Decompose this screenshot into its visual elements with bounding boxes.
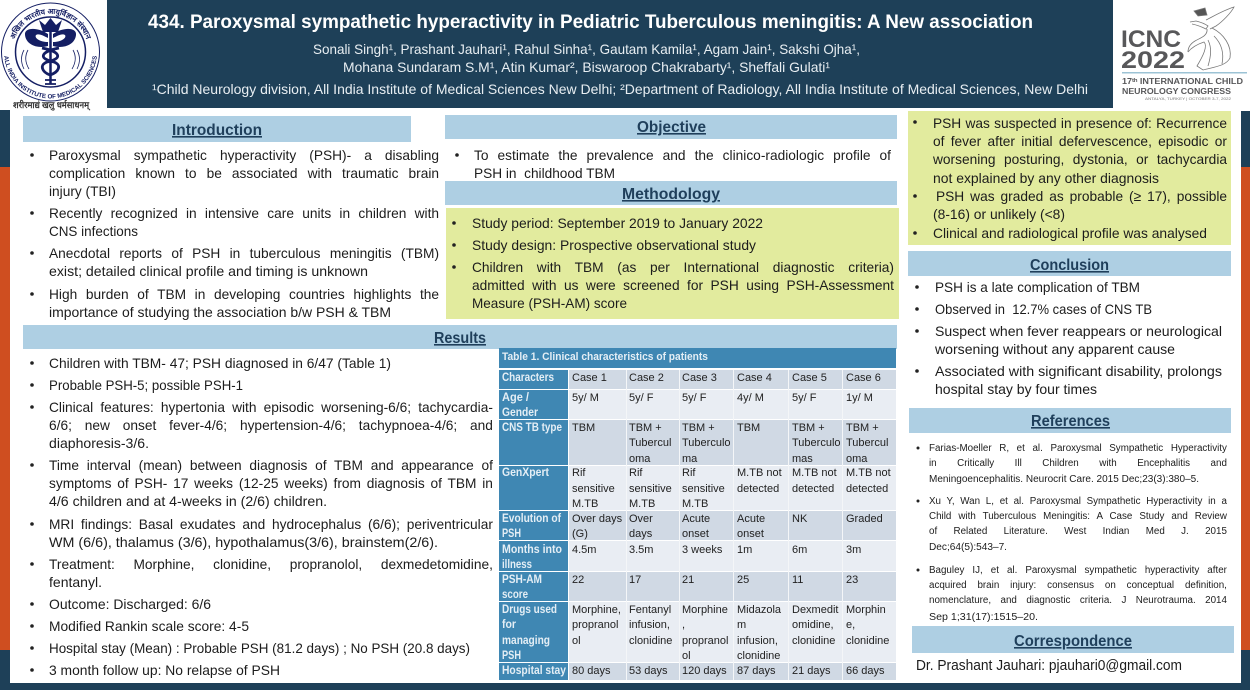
table cells: case 4: M.TB not: [737, 467, 782, 479]
list: references: acquired brain injury: consensus on conceptual definition,: [929, 580, 1227, 591]
table cells: case 2: TBM +: [629, 422, 662, 434]
table cells: case 2: Tubercul: [629, 437, 671, 449]
table cells: case 4: m: [737, 619, 746, 631]
table cells: case 4: Acute: [737, 513, 765, 525]
table cells: case 1: [572, 372, 623, 677]
table cells: case 2: clonidine: [629, 635, 672, 647]
table cells: case 4: onset: [737, 528, 764, 540]
table cells: case 3: Rif: [682, 467, 696, 479]
table row labels: PSH: [502, 650, 521, 662]
panel: methodology continued: Clinical and radiological profile was analysed: [933, 225, 1207, 241]
heading: conclusion: Conclusion: [1030, 257, 1109, 274]
list: references: Baguley IJ, et al. Paroxysmal sympathetic hyperactivity after: [929, 565, 1227, 576]
table cells: case 3: ma: [682, 453, 698, 465]
bullets: introduction: High burden of TBM in developing countries highlights the: [49, 286, 439, 302]
heading: introduction: Introduction: [172, 122, 262, 139]
table cells: case 3: 21: [682, 574, 694, 586]
table cells: case 2: Rif: [629, 467, 643, 479]
heading: methodology: [445, 181, 897, 205]
table cells: case 2: Fentanyl: [629, 604, 671, 616]
panel: methodology continued: of fever after initial defervescence, episodic or: [933, 133, 1227, 149]
table cells: case 4: TBM: [737, 422, 760, 434]
heading: objective: [445, 115, 897, 139]
table cells: case 1: 22: [572, 574, 584, 586]
table cells: case 5: M.TB not: [792, 467, 837, 479]
table cells: case 4: Case 4: [737, 372, 772, 384]
authors: Mohana Sundaram S.M¹, Atin Kumar², Biswaroop Chakrabarty¹, Sheffali Gulati¹: [343, 59, 830, 75]
table cells: case 3: Acute: [682, 513, 710, 525]
list: references: Dec;64(5):543–7.: [929, 542, 1007, 553]
table cells: case 6: 23: [846, 574, 858, 586]
table cells: case 6: 3m: [846, 544, 861, 556]
table cells: case 2: 53 days: [629, 665, 668, 677]
bullets: introduction: CNS infections: [49, 223, 138, 239]
table cells: case 3: sensitive: [682, 483, 725, 495]
table cells: case 5: omidine,: [792, 619, 834, 631]
panel: correspondence: [912, 626, 1234, 674]
table row labels: for: [502, 619, 516, 631]
panel: objective: [445, 115, 897, 181]
table cells: case 2: M.TB: [629, 498, 655, 510]
panel: methodology continued: PSH was graded as probable (≥ 17), possible: [936, 188, 1227, 204]
table cells: case 2: days: [629, 528, 653, 540]
table title: [499, 348, 896, 368]
title: 434. Paroxysmal sympathetic hyperactivity in Pediatric Tuberculous meningitis: A New association: [148, 11, 1033, 33]
list: references: Xu Y, Wan L, et al. Paroxysmal Sympathetic Hyperactivity in a: [929, 496, 1227, 507]
list: references: Sep 1;31(17):1515–20.: [929, 612, 1038, 623]
table cells: case 3: onset: [682, 528, 709, 540]
panel: introduction: [23, 116, 439, 320]
heading: methodology: Methodology: [622, 186, 720, 203]
text: objective: To estimate the prevalence and the clinico-radiologic profile of: [474, 147, 891, 163]
bullets: conclusion: Suspect when fever reappears or neurological: [935, 323, 1222, 339]
table cells: case 2: oma: [629, 453, 651, 465]
table row labels: Characters: [502, 372, 554, 384]
table row labels: Gender: [502, 407, 538, 419]
table cells: case 2: 17: [629, 574, 641, 586]
table row labels: Months into: [502, 544, 562, 556]
affiliations: ¹Child Neurology division, All India Institute of Medical Sciences New Delhi; ²Department of Radiology, All India Institute of Medical Sciences, New Delhi: [152, 81, 1088, 97]
table cells: case 6: oma: [846, 453, 868, 465]
bullets: results: 4/6 children and at 4-weeks in (2/6) children.: [49, 493, 327, 509]
table cells: case 4: [737, 372, 782, 677]
table cells: case 2: 5y/ F: [629, 392, 654, 404]
list: references: [916, 441, 1227, 623]
table row labels: CNS TB type: [502, 422, 562, 434]
list: references: Meningoencephalitis. Neurocrit Care. 2015 Dec;23(3):380–5.: [929, 474, 1199, 485]
table row labels: Hospital stay: [502, 665, 567, 677]
panel: methodology continued: PSH was suspected in presence of: Recurrence: [933, 115, 1227, 131]
bullets: introduction: complication known to be associated with traumatic brain: [49, 165, 439, 181]
table row labels: GenXpert: [502, 467, 549, 479]
bullets: introduction: Paroxysmal sympathetic hyperactivity (PSH)- a disabling: [49, 147, 439, 163]
list: references: Child with Tuberculous Meningitis: A Case Study and Review: [929, 511, 1227, 522]
table cells: case 5: Tuberculo: [792, 437, 841, 449]
table cells: case 3: 3 weeks: [682, 544, 723, 556]
bullets: conclusion: worsening without any apparent cause: [934, 341, 1175, 357]
text: objective: PSH in childhood TBM: [474, 165, 615, 181]
panel: methodology continued: (8-16) or unlikely (<8): [933, 206, 1065, 222]
methodology box: admitted with us were screened for PSH using PSH-Assessment: [472, 277, 894, 293]
heading: references: References: [1031, 413, 1110, 430]
methodology box: Measure (PSH-AM) score: [472, 295, 627, 311]
table cells: case 6: TBM +: [846, 422, 879, 434]
bullets: results: Probable PSH-5; possible PSH-1: [49, 377, 243, 393]
bullets: conclusion: [915, 279, 1222, 397]
logo: ICNC 2022: [1121, 7, 1247, 101]
table row labels: managing: [502, 635, 550, 647]
bullets: conclusion: PSH is a late complication of TBM: [935, 279, 1140, 295]
table cells: case 6: [846, 372, 891, 677]
table cells: case 1: sensitive: [572, 483, 615, 495]
bullets: results: Modified Rankin scale score: 4-5: [49, 618, 249, 634]
table cells: case 4: 1m: [737, 544, 752, 556]
heading: correspondence: [912, 626, 1234, 653]
logo: ICNC 2022: NEUROLOGY CONGRESS: [1122, 87, 1232, 96]
bullets: results: Children with TBM- 47; PSH diagnosed in 6/47 (Table 1): [49, 355, 391, 371]
table row labels: PSH-AM: [502, 574, 542, 586]
table cells: case 4: infusion,: [737, 635, 778, 647]
bullets: results: fentanyl.: [49, 574, 102, 590]
table cells: case 6: 1y/ M: [846, 392, 873, 404]
table cells: case 3: Case 3: [682, 372, 717, 384]
table cells: case 1: Case 1: [572, 372, 607, 384]
panel: methodology continued: [908, 111, 1231, 245]
bullets: introduction: importance of studying the association b/w PSH & TBM: [49, 304, 391, 320]
bullets: conclusion: Associated with significant disability, prolongs: [935, 363, 1222, 379]
table row labels: score: [502, 589, 528, 601]
bullets: results: Hospital stay (Mean) : Probable PSH (81.2 days) ; No PSH (20.8 days): [49, 640, 470, 656]
table cells: case 3: [682, 372, 731, 677]
bullets: results: Time interval (mean) between diagnosis of TBM and appearance of: [49, 457, 493, 473]
table cells: case 3: M.TB: [682, 498, 708, 510]
bullets: introduction: [30, 146, 439, 320]
table cells: case 4: Midazola: [737, 604, 782, 616]
table cells: case 6: Tubercul: [846, 437, 888, 449]
table cells: case 1: 4.5m: [572, 544, 596, 556]
table cells: case 5: Case 5: [792, 372, 827, 384]
table cells: case 6: clonidine: [846, 635, 889, 647]
bullets: results: 6/6; new onset fever-4/6; hypertension-4/6; tachypnoea-4/6; and: [49, 417, 493, 433]
table cells: case 5: clonidine: [792, 635, 835, 647]
bullets: results: Treatment: Morphine, clonidine, propranolol, dexmedetomidine,: [49, 556, 493, 572]
table cells: case 4: 87 days: [737, 665, 776, 677]
table cells: case 2: sensitive: [629, 483, 672, 495]
table cells: case 5: [792, 372, 841, 677]
table cells: case 2: Over: [629, 513, 653, 525]
table cells: case 1: 80 days: [572, 665, 611, 677]
table cells: case 3: ol: [682, 650, 691, 662]
logo: ICNC 2022: ICNC: [1121, 26, 1181, 53]
list: references: Farias-Moeller R, et al. Paroxysmal Sympathetic Hyperactivity: [929, 443, 1227, 454]
table cells: case 5: 6m: [792, 544, 807, 556]
table row labels: Age /: [502, 392, 530, 404]
table cells: case 6: M.TB not: [846, 467, 891, 479]
bullets: conclusion: hospital stay by four times: [935, 381, 1097, 397]
methodology box: Study design: Prospective observational study: [472, 237, 756, 253]
table cells: case 5: detected: [792, 483, 834, 495]
bullets: results: symptoms of PSH- 17 weeks (12-25 weeks) from diagnosis of TBM in: [49, 475, 493, 491]
logo: AIIMS seal: [0, 0, 107, 111]
table cells: case 3: Morphine: [682, 604, 728, 616]
table cells: case 2: 3.5m: [629, 544, 653, 556]
table cells: case 3: Tuberculo: [682, 437, 731, 449]
heading: conclusion: [908, 251, 1231, 276]
bullets: conclusion: Observed in 12.7% cases of CNS TB: [935, 301, 1152, 317]
table cells: case 2: infusion,: [629, 619, 670, 631]
table cells: case 5: mas: [792, 453, 813, 465]
table cells: case 1: (G): [572, 528, 588, 540]
list: references: of Related Literature. West Indian Med J. 2015: [929, 526, 1227, 537]
table cells: case 4: 25: [737, 574, 749, 586]
table cells: case 1: Morphine,: [572, 604, 621, 616]
table cells: case 5: 21 days: [792, 665, 831, 677]
table cells: case 5: 11: [792, 574, 803, 586]
table cells: case 2: Case 2: [629, 372, 664, 384]
contact line: Dr. Prashant Jauhari: pjauhari0@gmail.com: [916, 658, 1182, 674]
heading: results: [23, 325, 897, 349]
table cells: case 6: Morphin: [846, 604, 886, 616]
table cells: case 1: TBM: [572, 422, 595, 434]
text: objective: [455, 146, 891, 181]
table row labels: Evolution of: [502, 513, 561, 525]
table cells: case 6: Graded: [846, 513, 883, 525]
panel: methodology continued: worsening posturing, dystonia, or tachycardia: [933, 151, 1227, 167]
seal motto: शरीरमाद्यं खलु धर्मसाधनम्: [13, 99, 91, 111]
icon: whirling dervish: [1188, 7, 1234, 70]
table cells: case 6: Case 6: [846, 372, 881, 384]
table cells: case 3: TBM +: [682, 422, 715, 434]
bullets: introduction: Recently recognized in intensive care units in children with: [49, 205, 439, 221]
bullets: results: Clinical features: hypertonia with episodic worsening-6/6; tachycardia-: [49, 399, 493, 415]
table row labels: illness: [502, 559, 532, 571]
bullets: introduction: injury (TBI): [49, 183, 116, 199]
list: references: nomenclature, and diagnostic criteria. J Neurotrauma. 2014: [929, 595, 1227, 606]
panel: results: [23, 325, 897, 678]
table row shading: [499, 370, 896, 680]
table cells: case 1: 5y/ M: [572, 392, 599, 404]
table cells: case 5: Dexmedit: [792, 604, 838, 616]
bullets: results: MRI findings: Basal exudates and hydrocephalus (6/6); periventricular: [49, 516, 493, 532]
methodology box: Children with TBM (as per International diagnostic criteria): [472, 259, 894, 275]
table title: Table 1. Clinical characteristics of patients: [502, 351, 708, 363]
bullets: results: [30, 355, 493, 678]
bullets: introduction: Anecdotal reports of PSH in tuberculous meningitis (TBM): [49, 245, 439, 261]
logo: ICNC 2022: 2022: [1121, 47, 1185, 74]
heading: results: Results: [434, 330, 486, 347]
table cells: case 4: clonidine: [737, 650, 780, 662]
bullets: results: Outcome: Discharged: 6/6: [49, 596, 211, 612]
table cells: case 1: ol: [572, 635, 581, 647]
heading: introduction: [23, 116, 411, 142]
logo: AIIMS seal: अखिल भारतीय आयुर्विज्ञान संस्थान: [10, 8, 91, 40]
table cells: case 6: 66 days: [846, 665, 885, 677]
table cells: case 3: ,: [682, 619, 685, 631]
table cells: case 1: Over days: [572, 513, 623, 525]
heading: objective: Objective: [637, 119, 706, 136]
table cells: case 2: [629, 372, 672, 677]
table cells: case 4: 4y/ M: [737, 392, 764, 404]
authors: Sonali Singh¹, Prashant Jauhari¹, Rahul Sinha¹, Gautam Kamila¹, Agam Jain¹, Sakshi Ojha¹,: [313, 41, 860, 57]
bullets: results: diaphoresis-3/6.: [49, 435, 149, 451]
panel: references: [909, 408, 1231, 623]
table cells: case 4: detected: [737, 483, 779, 495]
table: clinical characteristics of patients: [499, 348, 896, 680]
table cells: case 1: propranol: [572, 619, 618, 631]
heading: references: [909, 408, 1231, 433]
panel: conclusion: [908, 251, 1231, 397]
table cells: case 5: TBM +: [792, 422, 825, 434]
bullets: introduction: exist; detailed clinical profile and timing is unknown: [49, 263, 368, 279]
logo: ICNC 2022: 17ᵗʰ INTERNATIONAL CHILD: [1122, 77, 1243, 86]
table row labels: [502, 372, 567, 677]
table cells: case 1: Rif: [572, 467, 586, 479]
table cells: case 5: NK: [792, 513, 808, 525]
logo: AIIMS seal: ALL INDIA INSTITUTE OF MEDICAL SCIENCES: [4, 56, 97, 98]
table cells: case 6: e,: [846, 619, 855, 631]
methodology box: [446, 208, 899, 319]
table row labels: Drugs used: [502, 604, 557, 616]
authors: [313, 41, 860, 75]
table row labels: PSH: [502, 528, 521, 540]
table cells: case 1: M.TB: [572, 498, 598, 510]
panel: methodology continued: not explained by any other diagnosis: [933, 170, 1159, 186]
methodology box: Study period: September 2019 to January 2022: [472, 215, 763, 231]
table cells: case 5: 5y/ F: [792, 392, 817, 404]
table cells: case 3: 120 days: [682, 665, 727, 677]
list: references: in Critically Ill Children with Encephalitis and: [929, 458, 1227, 469]
panel: methodology: [445, 181, 899, 319]
table cells: case 6: detected: [846, 483, 888, 495]
logo: ICNC 2022: ANTALYA, TURKEY | OCTOBER 3-7, 2022: [1145, 97, 1231, 101]
bullets: results: WM (6/6), thalamus (3/6), hypothalamus(3/6), brainstem(2/6).: [49, 534, 438, 550]
header banner: [107, 0, 1113, 107]
table cells: case 3: 5y/ F: [682, 392, 707, 404]
bullets: results: 3 month follow up: No relapse of PSH: [49, 662, 280, 678]
heading: correspondence: Correspondence: [1014, 633, 1132, 650]
table cells: case 3: propranol: [682, 635, 728, 647]
